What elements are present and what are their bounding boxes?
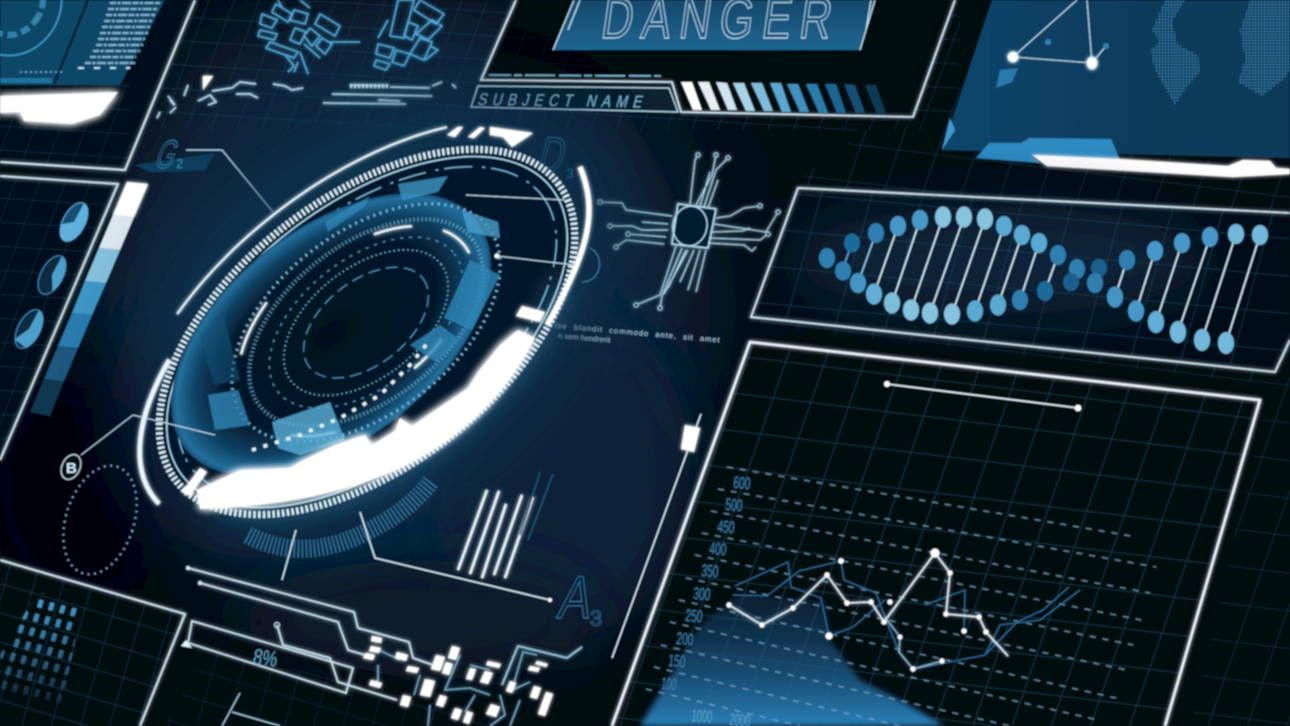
ring: top white tab bbox=[447, 127, 533, 147]
panel: circuit fragments bbox=[157, 76, 456, 118]
y axis labels: 500 bbox=[725, 495, 743, 515]
y axis labels: 300 bbox=[693, 584, 711, 604]
y axis labels: 400 bbox=[709, 539, 727, 559]
panel: fingerprint blocks bbox=[258, 0, 444, 74]
icon: microchip bbox=[598, 153, 780, 310]
label box: subject name bbox=[471, 86, 678, 112]
callout: B badge bbox=[57, 415, 133, 483]
circuit traces bbox=[188, 568, 582, 726]
label: D3 callout: D bbox=[533, 128, 572, 183]
ring: dome bbox=[120, 137, 542, 532]
callout: B badge: B bbox=[66, 460, 77, 477]
range marker bbox=[884, 381, 1081, 411]
panel: slanted bars bbox=[458, 490, 533, 578]
pie icons bbox=[9, 198, 94, 353]
ring: callout lines bbox=[133, 195, 575, 435]
panel: main line chart bbox=[612, 342, 1260, 726]
ring: base disc bbox=[95, 79, 639, 585]
y axis labels: 600 bbox=[733, 473, 751, 493]
panel: world map screen bbox=[942, 0, 1290, 177]
percent label: 8% bbox=[251, 644, 280, 672]
text column bbox=[85, 3, 160, 63]
white series bbox=[729, 553, 1008, 669]
gradient scale bar bbox=[30, 182, 148, 416]
ring: inner dot rings bbox=[212, 178, 520, 467]
callout: A3 line bbox=[282, 512, 602, 631]
danger plate bbox=[553, 0, 875, 50]
blue series bbox=[733, 561, 1080, 669]
y axis labels bbox=[661, 473, 751, 726]
white tab bbox=[0, 92, 118, 124]
panel: bottom-left grid with dot columns bbox=[0, 560, 192, 726]
map continents bbox=[1150, 0, 1290, 105]
ring: blue data segments bbox=[200, 176, 500, 455]
ring: right white arc bbox=[547, 167, 589, 325]
y axis labels: 250 bbox=[685, 606, 703, 626]
panel: bottom circuit bbox=[165, 566, 620, 726]
ring: outer white arcs bbox=[50, 38, 684, 626]
ring: lower tick fan bbox=[248, 480, 432, 549]
helix rungs bbox=[842, 217, 1260, 343]
helix nodes bbox=[819, 206, 1268, 354]
y axis labels: 350 bbox=[701, 561, 719, 581]
y axis labels: 450 bbox=[717, 517, 735, 537]
dashed gridlines bbox=[646, 467, 1156, 726]
network nodes bbox=[1008, 0, 1109, 69]
dot matrix bbox=[0, 592, 82, 705]
white chips bbox=[363, 636, 553, 724]
y axis labels: 150 bbox=[668, 651, 686, 671]
ring: inner white arcs bbox=[196, 164, 536, 482]
tab: blue and white bbox=[976, 138, 1120, 163]
ring: tick ring bbox=[94, 77, 640, 587]
text block: lorem caption: lse blandit commodo ante, sit amet bbox=[555, 321, 721, 344]
label: D3 callout: 3 bbox=[566, 165, 574, 181]
panel: bottom-left mini frame bbox=[222, 693, 280, 726]
progress stripes bbox=[681, 82, 886, 114]
chart: holographic ring bbox=[21, 0, 711, 653]
ring: bright band bbox=[197, 330, 535, 509]
callout: A3 line: 3 bbox=[590, 606, 602, 631]
circular gauge bbox=[0, 0, 80, 73]
slider: vertical slider bbox=[612, 414, 701, 658]
label: G2 callout: G bbox=[150, 133, 184, 177]
label: G2 callout: 2 bbox=[176, 156, 183, 171]
y axis labels: 200 bbox=[676, 629, 694, 649]
icon: dotted ellipse bbox=[50, 456, 150, 584]
panel: left screen with pies bbox=[0, 176, 148, 460]
area chart bbox=[640, 592, 945, 726]
callout: A3 line: A bbox=[554, 563, 599, 631]
panel: DNA helix bbox=[751, 188, 1290, 372]
label: G2 callout bbox=[135, 133, 273, 212]
label box: subject name: SUBJECT NAME bbox=[476, 91, 645, 112]
data dots bbox=[726, 548, 989, 672]
panel: top network / DANGER frame bbox=[471, 0, 955, 117]
ring: dotted band accent bbox=[252, 340, 430, 450]
y axis labels: 100 bbox=[661, 674, 677, 694]
panel: top-left data screens bbox=[0, 0, 195, 170]
text block: lorem caption: n sem hendrerit bbox=[558, 331, 611, 345]
ring: outer glow band bbox=[101, 84, 633, 580]
